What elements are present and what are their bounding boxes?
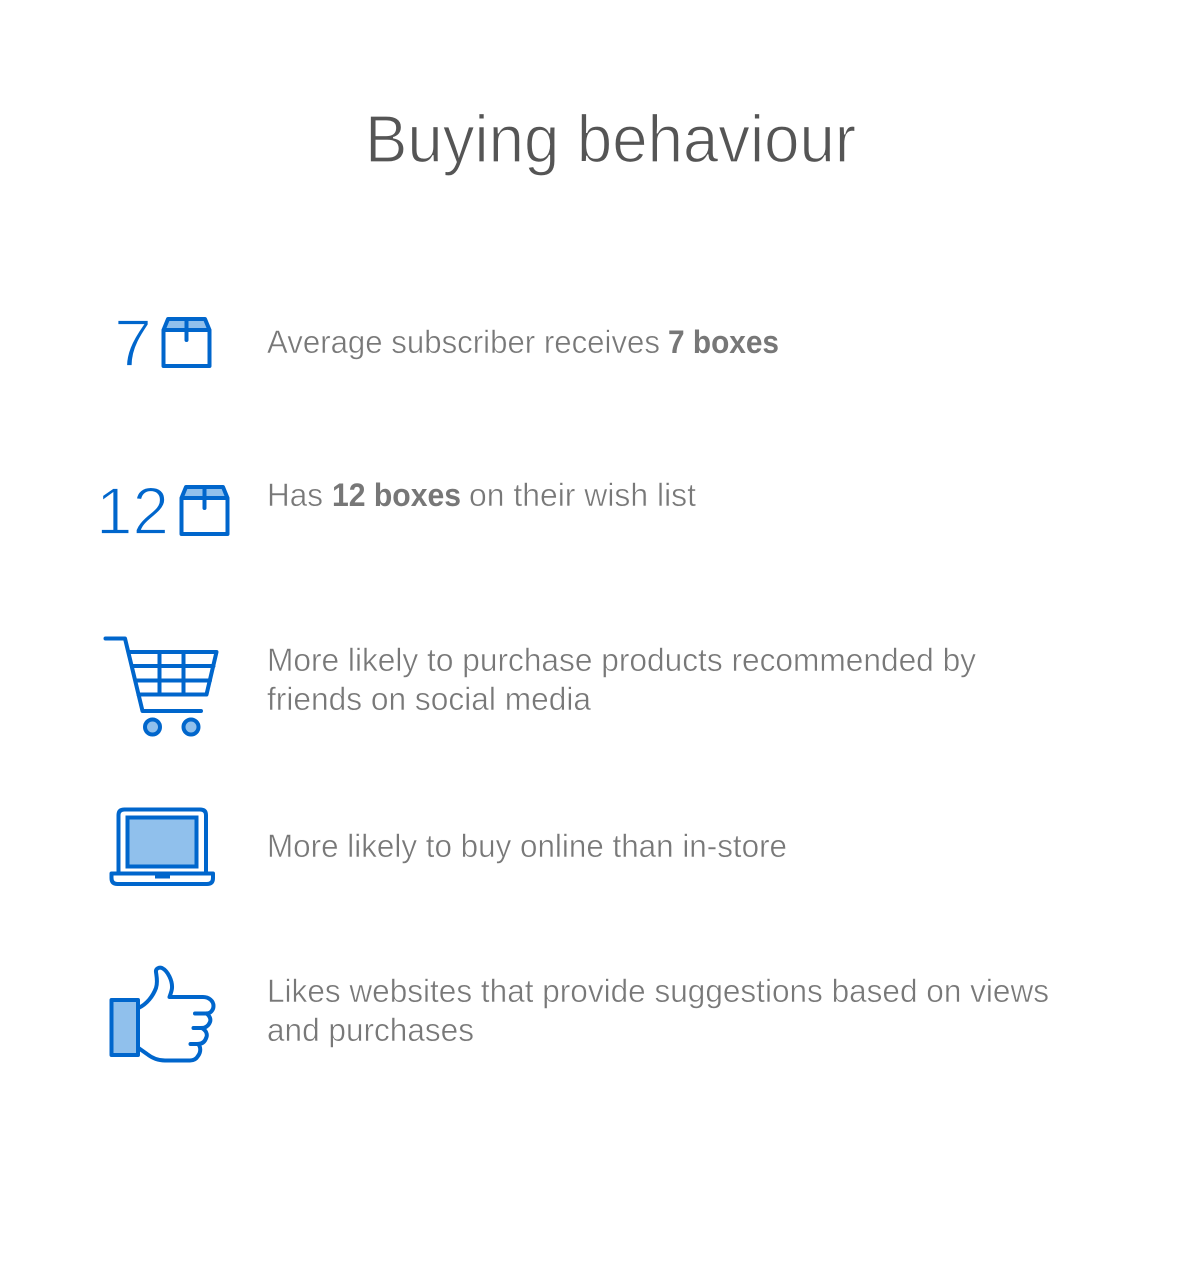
row: 12 boxes xyxy=(96,474,696,549)
text: suggestions: and purchases xyxy=(267,1012,474,1048)
title: Buying behaviour xyxy=(365,102,856,177)
icon: thumbs up xyxy=(112,968,214,1060)
number 12: 12 xyxy=(96,474,169,549)
text: average subscriber: Average subscriber receives xyxy=(267,324,660,360)
text: suggestions xyxy=(267,973,1049,1048)
text: 12 boxes bold: 12 boxes xyxy=(332,477,461,513)
row: 7 boxes xyxy=(114,306,779,381)
icon: shopping cart xyxy=(106,638,216,734)
number 7: 7 xyxy=(114,306,152,381)
text: purchase products xyxy=(267,642,976,717)
text: on their wish list: on their wish list xyxy=(469,477,696,513)
text: purchase products: More likely to purchase products recommended by xyxy=(267,642,976,678)
icon: box xyxy=(181,487,228,534)
text: suggestions: Likes websites that provide suggestions based on views xyxy=(267,973,1049,1009)
icon: box xyxy=(163,319,210,366)
text: 7 boxes bold: 7 boxes xyxy=(668,324,779,360)
text: buy online: More likely to buy online than in-store xyxy=(267,828,787,864)
text: has: Has xyxy=(267,477,323,513)
icon: laptop xyxy=(112,810,213,884)
text: purchase products: friends on social media xyxy=(267,681,591,717)
